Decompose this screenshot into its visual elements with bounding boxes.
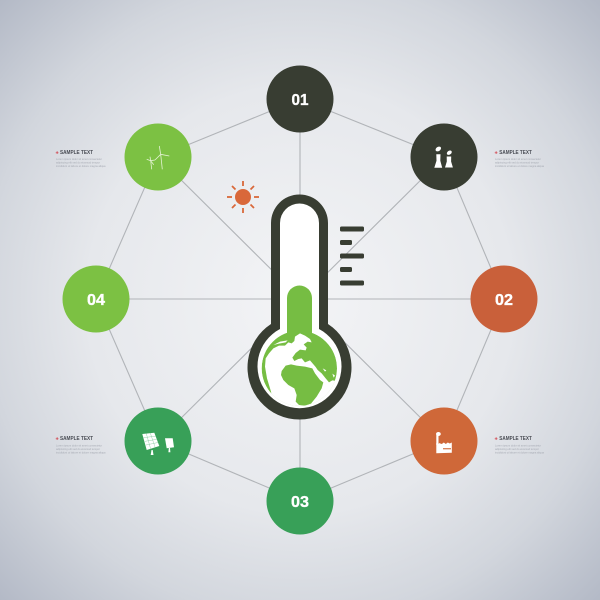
icon: cooling towers: [434, 146, 453, 168]
landmass: africa: [281, 364, 323, 406]
landmass: white americas and oceans: [265, 333, 335, 406]
text block: bottom right: [494, 436, 544, 454]
text block: top right: [494, 150, 544, 168]
thermometer outline: [248, 194, 352, 419]
globe: [262, 332, 337, 406]
text block: top right: SAMPLE TEXT: [499, 150, 533, 156]
node: power plant: [410, 124, 478, 190]
text block: top left: Lorem ipsum dolor sit amet consectetur: [56, 157, 102, 161]
text block: bottom left: [56, 436, 106, 454]
node 02: [470, 266, 538, 332]
node 03: [266, 468, 334, 534]
text block: bottom left: adipiscing elit sed do eiusmod tempor: [56, 447, 100, 451]
text block: top right: Lorem ipsum dolor sit amet consectetur: [495, 157, 541, 161]
landmass: alaska streak: [273, 340, 288, 345]
icon: factory: [436, 432, 452, 453]
icon: wind turbines: [147, 146, 169, 169]
node 03: 03: [291, 494, 309, 511]
text block: top right: +: [494, 150, 498, 156]
text block: bottom left: SAMPLE TEXT: [60, 436, 94, 442]
text block: bottom right: Lorem ipsum dolor sit amet consectetur: [495, 443, 541, 447]
node: solar panels: [124, 408, 192, 474]
text block: bottom left: incididunt ut labore et dolore magna aliqua: [56, 450, 106, 454]
thermometer: [248, 194, 352, 419]
text block: top right: adipiscing elit sed do eiusmod tempor: [495, 160, 539, 164]
sun icon: [227, 181, 259, 213]
text block: top left: [56, 150, 106, 168]
text block: bottom left: Lorem ipsum dolor sit amet consectetur: [56, 443, 102, 447]
network lines: [96, 99, 504, 501]
node 04: [62, 266, 130, 332]
node 02: 02: [495, 292, 513, 309]
text block: bottom right: incididunt ut labore et dolore magna aliqua: [495, 450, 544, 454]
node 01: 01: [292, 92, 309, 109]
thermometer inner: [258, 204, 342, 408]
landmass: gulf: [323, 368, 335, 378]
text block: bottom left: +: [56, 436, 59, 442]
text block: bottom right: SAMPLE TEXT: [499, 436, 533, 442]
icon: solar panels: [142, 433, 174, 455]
temperature ticks: [340, 226, 364, 286]
node 04: 04: [87, 292, 105, 309]
text block: bottom right: +: [494, 436, 498, 442]
node 01: [266, 66, 334, 132]
text block: top left: SAMPLE TEXT: [60, 150, 94, 156]
node: factory: [410, 408, 478, 474]
mercury column: [287, 286, 312, 345]
text block: top left: adipiscing elit sed do eiusmod tempor: [56, 160, 100, 164]
text block: top left: incididunt ut labore et dolore magna aliqua: [56, 164, 106, 168]
node: wind turbines: [124, 124, 192, 190]
text block: top right: incididunt ut labore et dolore magna aliqua: [495, 164, 544, 168]
text block: top left: +: [56, 150, 59, 156]
text block: bottom right: adipiscing elit sed do eiusmod tempor: [495, 447, 539, 451]
